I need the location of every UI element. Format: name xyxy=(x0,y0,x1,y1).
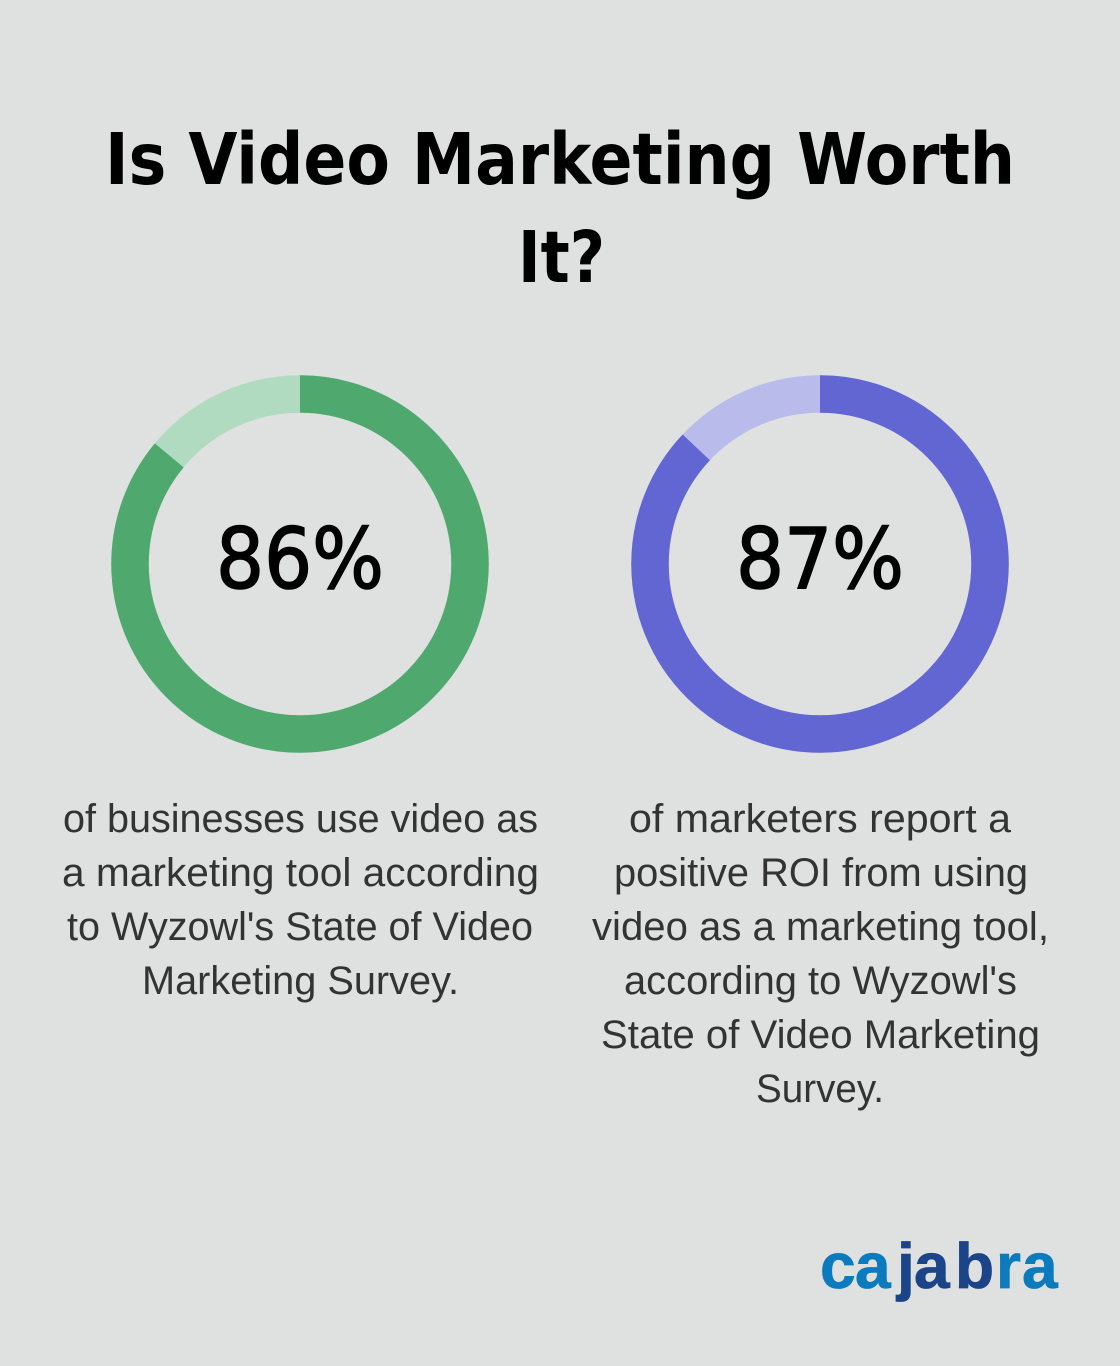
description: marketers xyxy=(592,797,1049,1111)
description: businesses: Marketing Survey. xyxy=(142,959,459,1003)
donut chart: 86% xyxy=(130,394,470,734)
title xyxy=(105,118,1015,299)
description: marketers: positive ROI from using xyxy=(614,851,1028,895)
panel: 87% marketers xyxy=(592,394,1049,1111)
logo: cajabra: ca xyxy=(820,1230,891,1302)
logo: cajabra: ra xyxy=(996,1230,1058,1302)
donut chart: 87% xyxy=(650,394,990,734)
description: marketers: State of Video Marketing xyxy=(601,1013,1040,1057)
description: businesses: to Wyzowl's State of Video xyxy=(67,905,533,949)
description: businesses xyxy=(62,797,539,1003)
title: It? xyxy=(518,216,605,299)
description: businesses: a marketing tool according xyxy=(62,851,539,895)
description: businesses: of businesses use video as xyxy=(63,797,538,841)
description: marketers: according to Wyzowl's xyxy=(624,959,1017,1003)
logo: cajabra: ab xyxy=(914,1230,994,1302)
description: marketers: of marketers report a xyxy=(629,797,1012,841)
value: 87%: 87% xyxy=(736,510,904,608)
logo: cajabra: j xyxy=(896,1230,915,1302)
description: marketers: Survey. xyxy=(756,1067,884,1111)
value: 86%: 86% xyxy=(216,510,384,608)
panel: 86% businesses xyxy=(62,394,539,1003)
title: Is Video Marketing Worth xyxy=(105,118,1015,201)
description: marketers: video as a marketing tool, xyxy=(592,905,1049,949)
